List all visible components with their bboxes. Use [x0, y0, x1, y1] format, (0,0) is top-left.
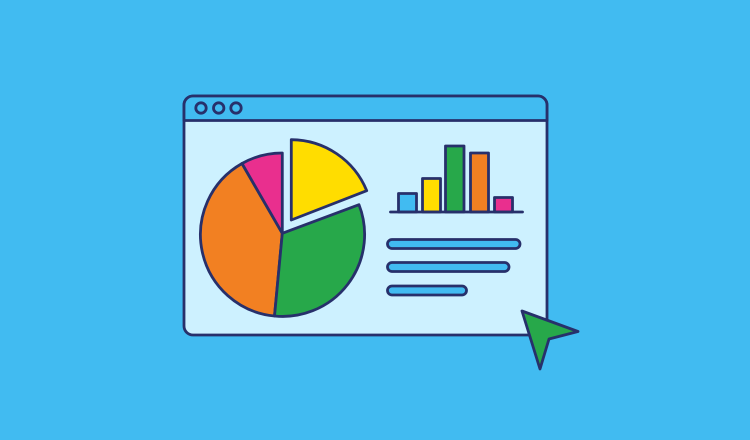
pie slice: pink: [242, 153, 282, 233]
chart baseline: [390, 211, 522, 213]
line: long: [388, 240, 520, 248]
icon: green cursor arrow: [522, 311, 578, 369]
pie chart: [200, 140, 367, 316]
bar: green: [446, 146, 464, 212]
window control buttons: [196, 103, 241, 113]
pie slice: orange: [200, 164, 282, 316]
bar: yellow: [422, 178, 440, 212]
pie slice: yellow, pulled out: [291, 140, 367, 220]
bar: blue: [398, 194, 416, 212]
window body: [184, 96, 547, 335]
bar: orange: [470, 153, 488, 212]
text placeholder lines: [388, 240, 520, 295]
window title bar: [184, 96, 547, 120]
bar: pink: [494, 198, 512, 212]
line: short: [388, 286, 466, 295]
panel: browser window: [184, 96, 547, 335]
bar chart: [390, 146, 522, 212]
pie slice: green: [274, 205, 365, 316]
line: medium: [388, 262, 509, 272]
